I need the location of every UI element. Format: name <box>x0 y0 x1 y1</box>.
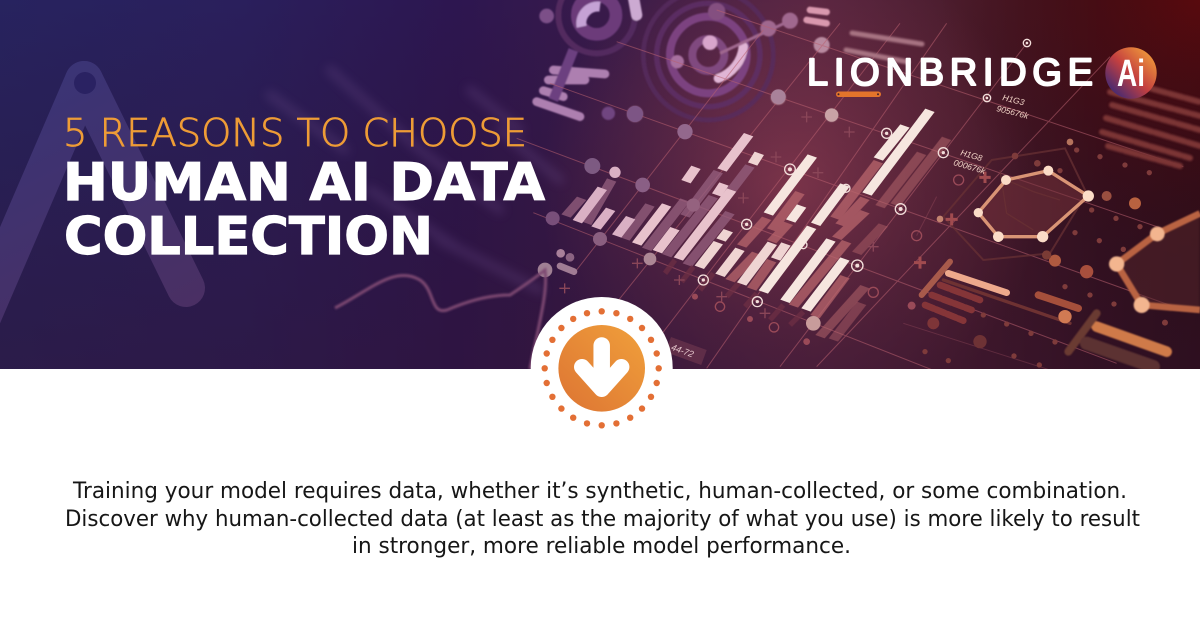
bright bars <box>573 109 935 312</box>
bar chart panel <box>517 10 1183 390</box>
grid nodes <box>698 39 1031 307</box>
chart annotation labels: 905676k <box>996 103 1030 121</box>
chart annotation labels: H1G3 <box>1002 92 1026 107</box>
watermark letter A <box>0 72 186 345</box>
tag label 44-72 <box>666 337 707 365</box>
blurred background data marks <box>270 70 560 290</box>
logo AI badge: Ai <box>1117 53 1145 95</box>
title kicker: 5 REASONS TO CHOOSE <box>63 111 527 155</box>
data table blocks <box>922 262 1078 323</box>
hero banner <box>0 0 1200 390</box>
dim bars, right side <box>725 137 951 342</box>
logo AI badge <box>1105 47 1157 99</box>
description paragraph: in stronger, more reliable model performance. <box>352 533 851 559</box>
soft blurred nodes <box>538 89 838 331</box>
icon: down arrow <box>582 346 621 389</box>
title block <box>63 111 545 267</box>
title main line 1: HUMAN AI DATA <box>63 153 545 213</box>
chart annotation labels: 000676k <box>952 157 987 176</box>
badge orange disc <box>558 325 645 412</box>
description paragraph: Discover why human-collected data (at least as the majority of what you use) is more likely to result <box>65 506 1140 532</box>
radial gauge charts <box>537 0 838 122</box>
download badge <box>531 297 673 439</box>
top blurred labels <box>846 33 922 62</box>
short base bars <box>665 260 803 325</box>
badge white backing circle <box>531 297 673 439</box>
plus marks <box>559 112 879 318</box>
radar charts <box>914 139 1200 368</box>
scattered dots <box>922 139 1168 368</box>
perspective grid lines <box>517 10 1183 390</box>
badge dotted ring <box>542 308 662 428</box>
sparkline chart <box>335 270 546 369</box>
description paragraph: Training your model requires data, whether it’s synthetic, human-collected, or some combination. <box>72 478 1127 504</box>
top right data table <box>1102 80 1200 166</box>
tag label 44-72: 44-72 <box>670 342 695 359</box>
logo: Lionbridge AI <box>807 47 1157 99</box>
dim bars, left side <box>561 164 755 267</box>
chart annotation labels <box>952 92 1030 176</box>
logo wordmark: LIONBRIDGE <box>807 52 1093 94</box>
dim ring nodes <box>715 175 964 332</box>
description paragraph <box>65 478 1140 559</box>
chart annotation labels: H1G8 <box>959 147 984 163</box>
title main line 2: COLLECTION <box>64 207 433 267</box>
logo orange bridge bar <box>836 92 881 97</box>
